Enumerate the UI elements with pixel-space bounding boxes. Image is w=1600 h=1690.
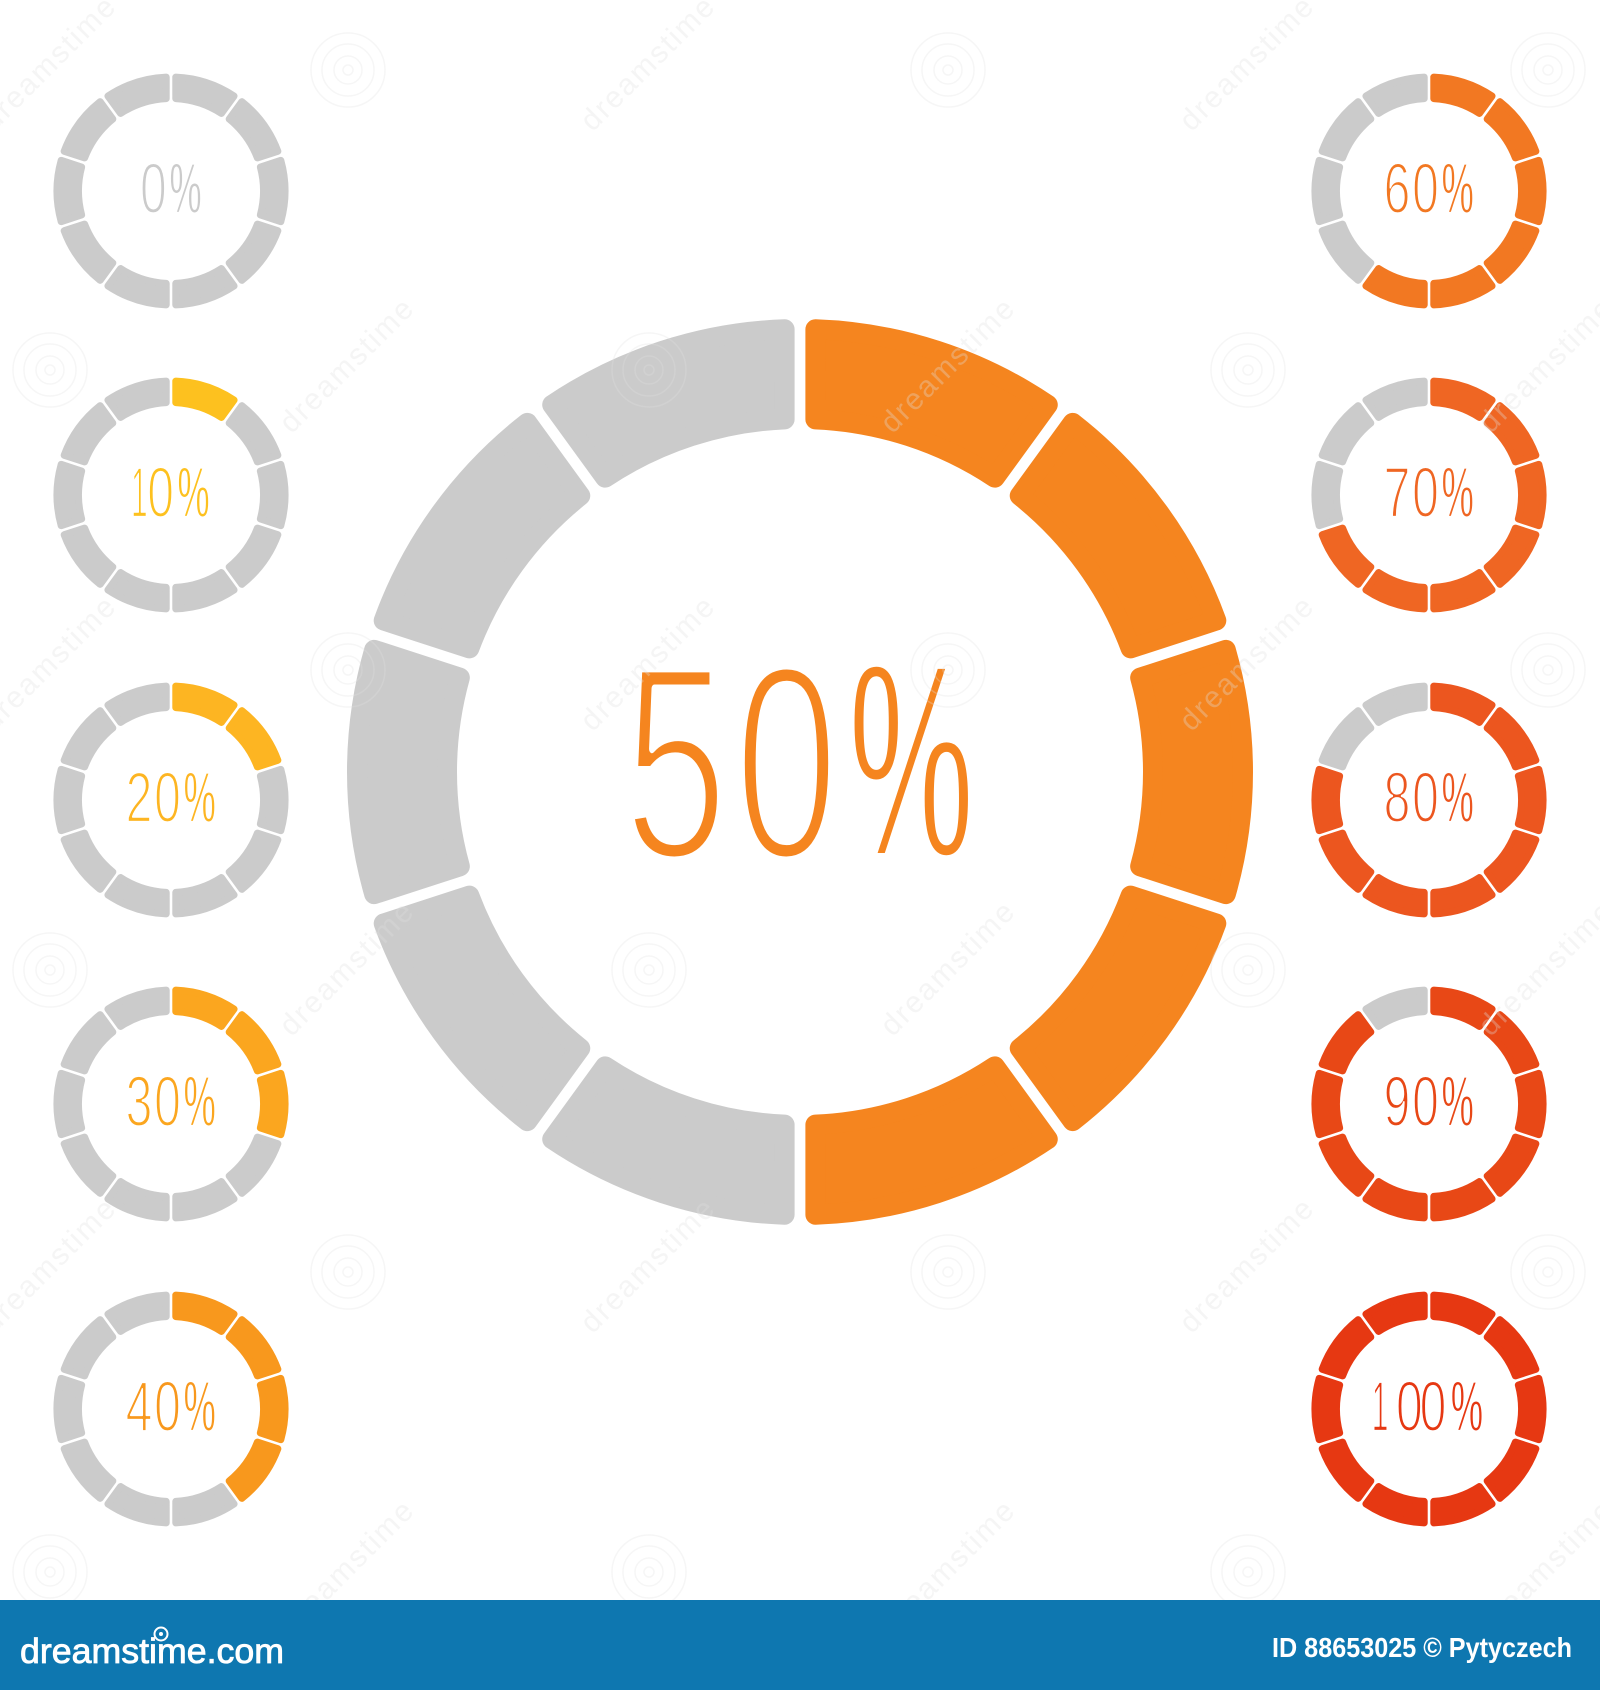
ring: 20%: 20 [126,758,181,837]
watermark text: dreamstime [1173,1191,1321,1339]
watermark text: dreamstime [874,1493,1022,1641]
ring: 60% [1315,73,1543,309]
footer credit: ID 88653025 © Pytyczech [1272,1632,1572,1663]
watermark text: dreamstime [874,894,1022,1042]
ring: 10% [57,377,285,613]
ring: 100%: % [1451,1366,1483,1448]
watermark text: dreamstime [574,1191,722,1339]
watermark text: dreamstime [574,589,722,737]
ring: 100% [1315,1291,1543,1527]
ring: 80% [1315,682,1543,918]
ring: 30% [57,986,285,1222]
ring: 100%: 1 [1372,1367,1388,1447]
ring: 90% [1315,986,1543,1222]
ring: 70%: 70 [1384,453,1439,532]
ring: 70%: % [1441,452,1474,534]
main ring chart: 50% [357,313,1243,1231]
ring: 60%: % [1441,148,1474,230]
ring: 20%: % [183,757,216,839]
ring: 80%: % [1441,757,1474,839]
ring: 30%: 30 [126,1062,181,1141]
ring: 40% [57,1291,285,1527]
ring: 10%: 0 [147,453,174,532]
ring: 0%: % [169,148,202,230]
ring: 80%: 80 [1384,758,1439,837]
ring: 40%: % [183,1366,216,1448]
ring: 60%: 60 [1384,149,1439,228]
ring: 40%: 40 [126,1367,181,1446]
watermark text: dreamstime [273,291,421,439]
ring: 10%: 1 [131,453,148,533]
footer logo: dreamstime.com: dreamstime.com [20,1632,284,1671]
ring: 100%: 00 [1396,1367,1446,1446]
ring: 0% [57,73,285,309]
watermark text: dreamstime [874,291,1022,439]
ring: 30%: % [183,1061,216,1143]
ring: 20% [57,682,285,918]
main percentage label: 50%: 50 [624,608,838,917]
ring: 70% [1315,377,1543,613]
footer bar [0,1600,1600,1690]
watermark text: dreamstime [273,894,421,1042]
ring: 0%: 0 [140,149,167,228]
ring: 10%: % [177,452,210,534]
ring: 90%: % [1441,1061,1474,1143]
main percentage label: 50%: % [848,601,975,920]
watermark text: dreamstime [273,1493,421,1641]
main percentage label: 50% [624,601,975,920]
watermark text: dreamstime [1173,589,1321,737]
ring: 90%: 90 [1384,1062,1439,1141]
